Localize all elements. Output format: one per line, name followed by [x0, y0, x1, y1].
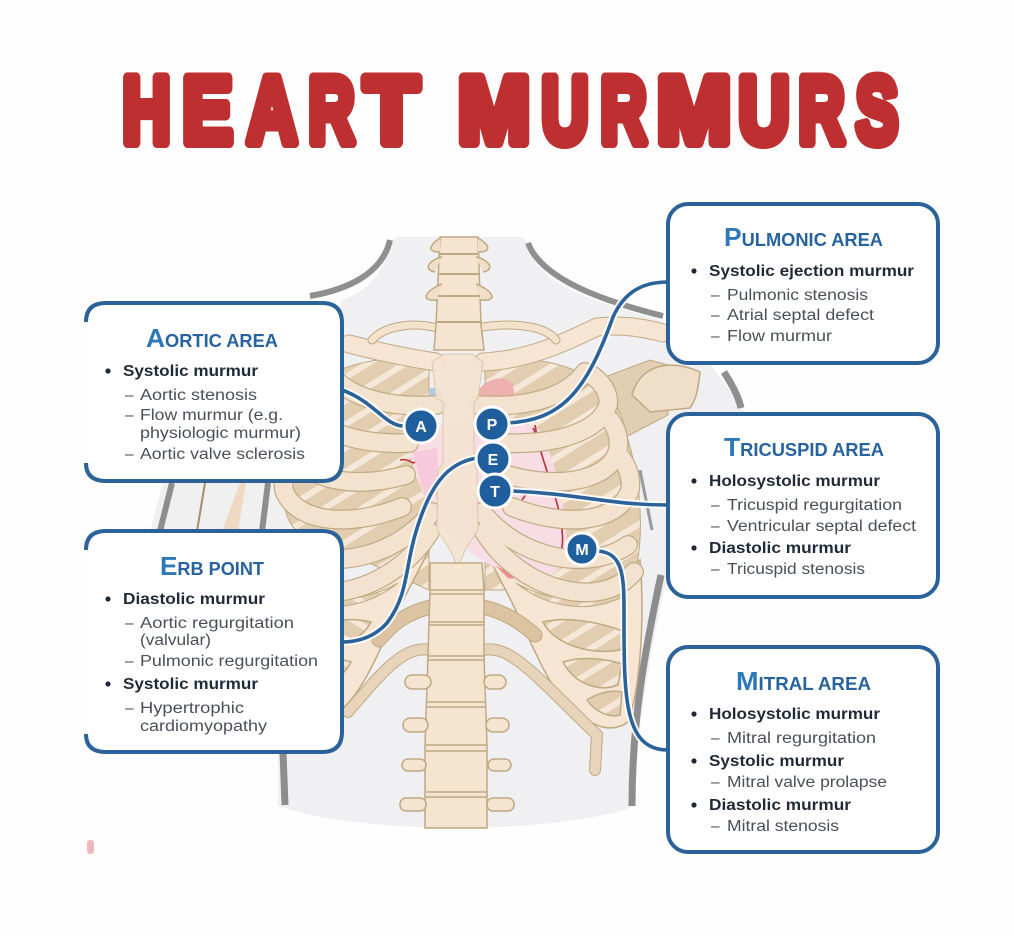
title: U	[738, 58, 790, 162]
text block: –	[125, 387, 134, 404]
text block: –	[125, 407, 134, 424]
title: R	[308, 58, 354, 162]
text block: Atrial septal defect	[727, 307, 875, 324]
text block: Flow murmur (e.g.	[140, 407, 283, 424]
text block: Systolic murmur	[123, 676, 258, 693]
text block: Diastolic murmur	[709, 540, 851, 557]
title: U	[542, 58, 588, 162]
title: R	[600, 58, 646, 162]
clavicles and first ribs	[349, 325, 663, 362]
heading: AORTIC AREA	[146, 323, 278, 353]
text block: –	[711, 497, 720, 514]
text block: –	[711, 730, 720, 747]
heading: PULMONIC AREA	[724, 222, 883, 252]
ribs	[280, 372, 634, 592]
title: H	[122, 58, 170, 162]
text block: Pulmonic stenosis	[727, 287, 868, 304]
heading: MITRAL AREA	[736, 666, 871, 696]
text block: Aortic regurgitation	[140, 615, 294, 632]
text block: Hypertrophic	[140, 700, 244, 717]
text block: –	[711, 287, 720, 304]
marker A	[404, 409, 438, 443]
text block: Mitral valve prolapse	[727, 774, 887, 791]
text block: –	[711, 818, 720, 835]
text block: Mitral regurgitation	[727, 730, 876, 747]
small pink mark	[87, 840, 94, 854]
text block	[105, 363, 305, 463]
text block: –	[711, 328, 720, 345]
marker P: P	[487, 417, 498, 434]
heading: ERB POINT	[160, 551, 264, 581]
text block: (valvular)	[140, 632, 211, 649]
marker T: T	[490, 484, 500, 501]
marker P	[475, 407, 509, 441]
panel: aortic area	[86, 303, 342, 481]
text block	[691, 263, 914, 345]
title: S	[856, 58, 898, 162]
marker E: E	[488, 452, 499, 469]
text block: –	[125, 446, 134, 463]
text block	[691, 706, 887, 835]
text block: Systolic murmur	[709, 753, 844, 770]
heart	[400, 378, 566, 580]
marker A: A	[415, 419, 427, 436]
torso illustration	[150, 237, 745, 828]
title: E	[182, 58, 232, 162]
text block: Pulmonic regurgitation	[140, 653, 318, 670]
text block: Diastolic murmur	[709, 797, 851, 814]
text block: physiologic murmur)	[140, 425, 301, 442]
sternum	[432, 354, 483, 567]
marker M: M	[575, 542, 589, 559]
marker M	[566, 533, 598, 565]
hatched rib cage interior	[485, 358, 640, 590]
transverse processes	[400, 675, 514, 811]
text block: Systolic murmur	[123, 363, 258, 380]
panel: mitral area	[668, 647, 938, 852]
spine	[425, 237, 492, 828]
marker T	[478, 474, 512, 508]
text block: Diastolic murmur	[123, 591, 265, 608]
marker E	[476, 442, 510, 476]
text block: Holosystolic murmur	[709, 706, 880, 723]
title: R	[798, 58, 844, 162]
posterior lower ribs	[348, 607, 597, 770]
text block: Systolic ejection murmur	[709, 263, 914, 280]
text block: –	[711, 561, 720, 578]
text block: –	[125, 653, 134, 670]
body silhouette	[278, 237, 745, 828]
title: T	[364, 58, 418, 162]
text block: –	[711, 307, 720, 324]
title: A	[247, 58, 297, 162]
text block	[105, 591, 318, 735]
text block: Aortic valve sclerosis	[140, 446, 305, 463]
title	[122, 58, 898, 162]
text block: Holosystolic murmur	[709, 473, 880, 490]
text block: cardiomyopathy	[140, 718, 267, 735]
text block: Mitral stenosis	[727, 818, 839, 835]
connector lines	[342, 282, 668, 750]
text block: –	[711, 518, 720, 535]
text block: Flow murmur	[727, 328, 832, 345]
panel: Erb point	[86, 531, 342, 752]
panel: pulmonic area	[668, 204, 938, 363]
panel: tricuspid area	[668, 414, 938, 597]
text block: Tricuspid stenosis	[727, 561, 865, 578]
text block: –	[125, 615, 134, 632]
body outlines	[310, 240, 390, 296]
text block: –	[125, 700, 134, 717]
text block: Aortic stenosis	[140, 387, 257, 404]
left arm	[150, 470, 342, 532]
scapula and humerus	[597, 360, 668, 440]
lower rib cage	[484, 548, 642, 728]
text block: Tricuspid regurgitation	[727, 497, 902, 514]
heading: TRICUSPID AREA	[724, 432, 884, 462]
title: M	[458, 58, 530, 162]
text block: –	[711, 774, 720, 791]
text block	[691, 473, 917, 578]
text block: Ventricular septal defect	[727, 518, 917, 535]
title: M	[657, 58, 731, 162]
